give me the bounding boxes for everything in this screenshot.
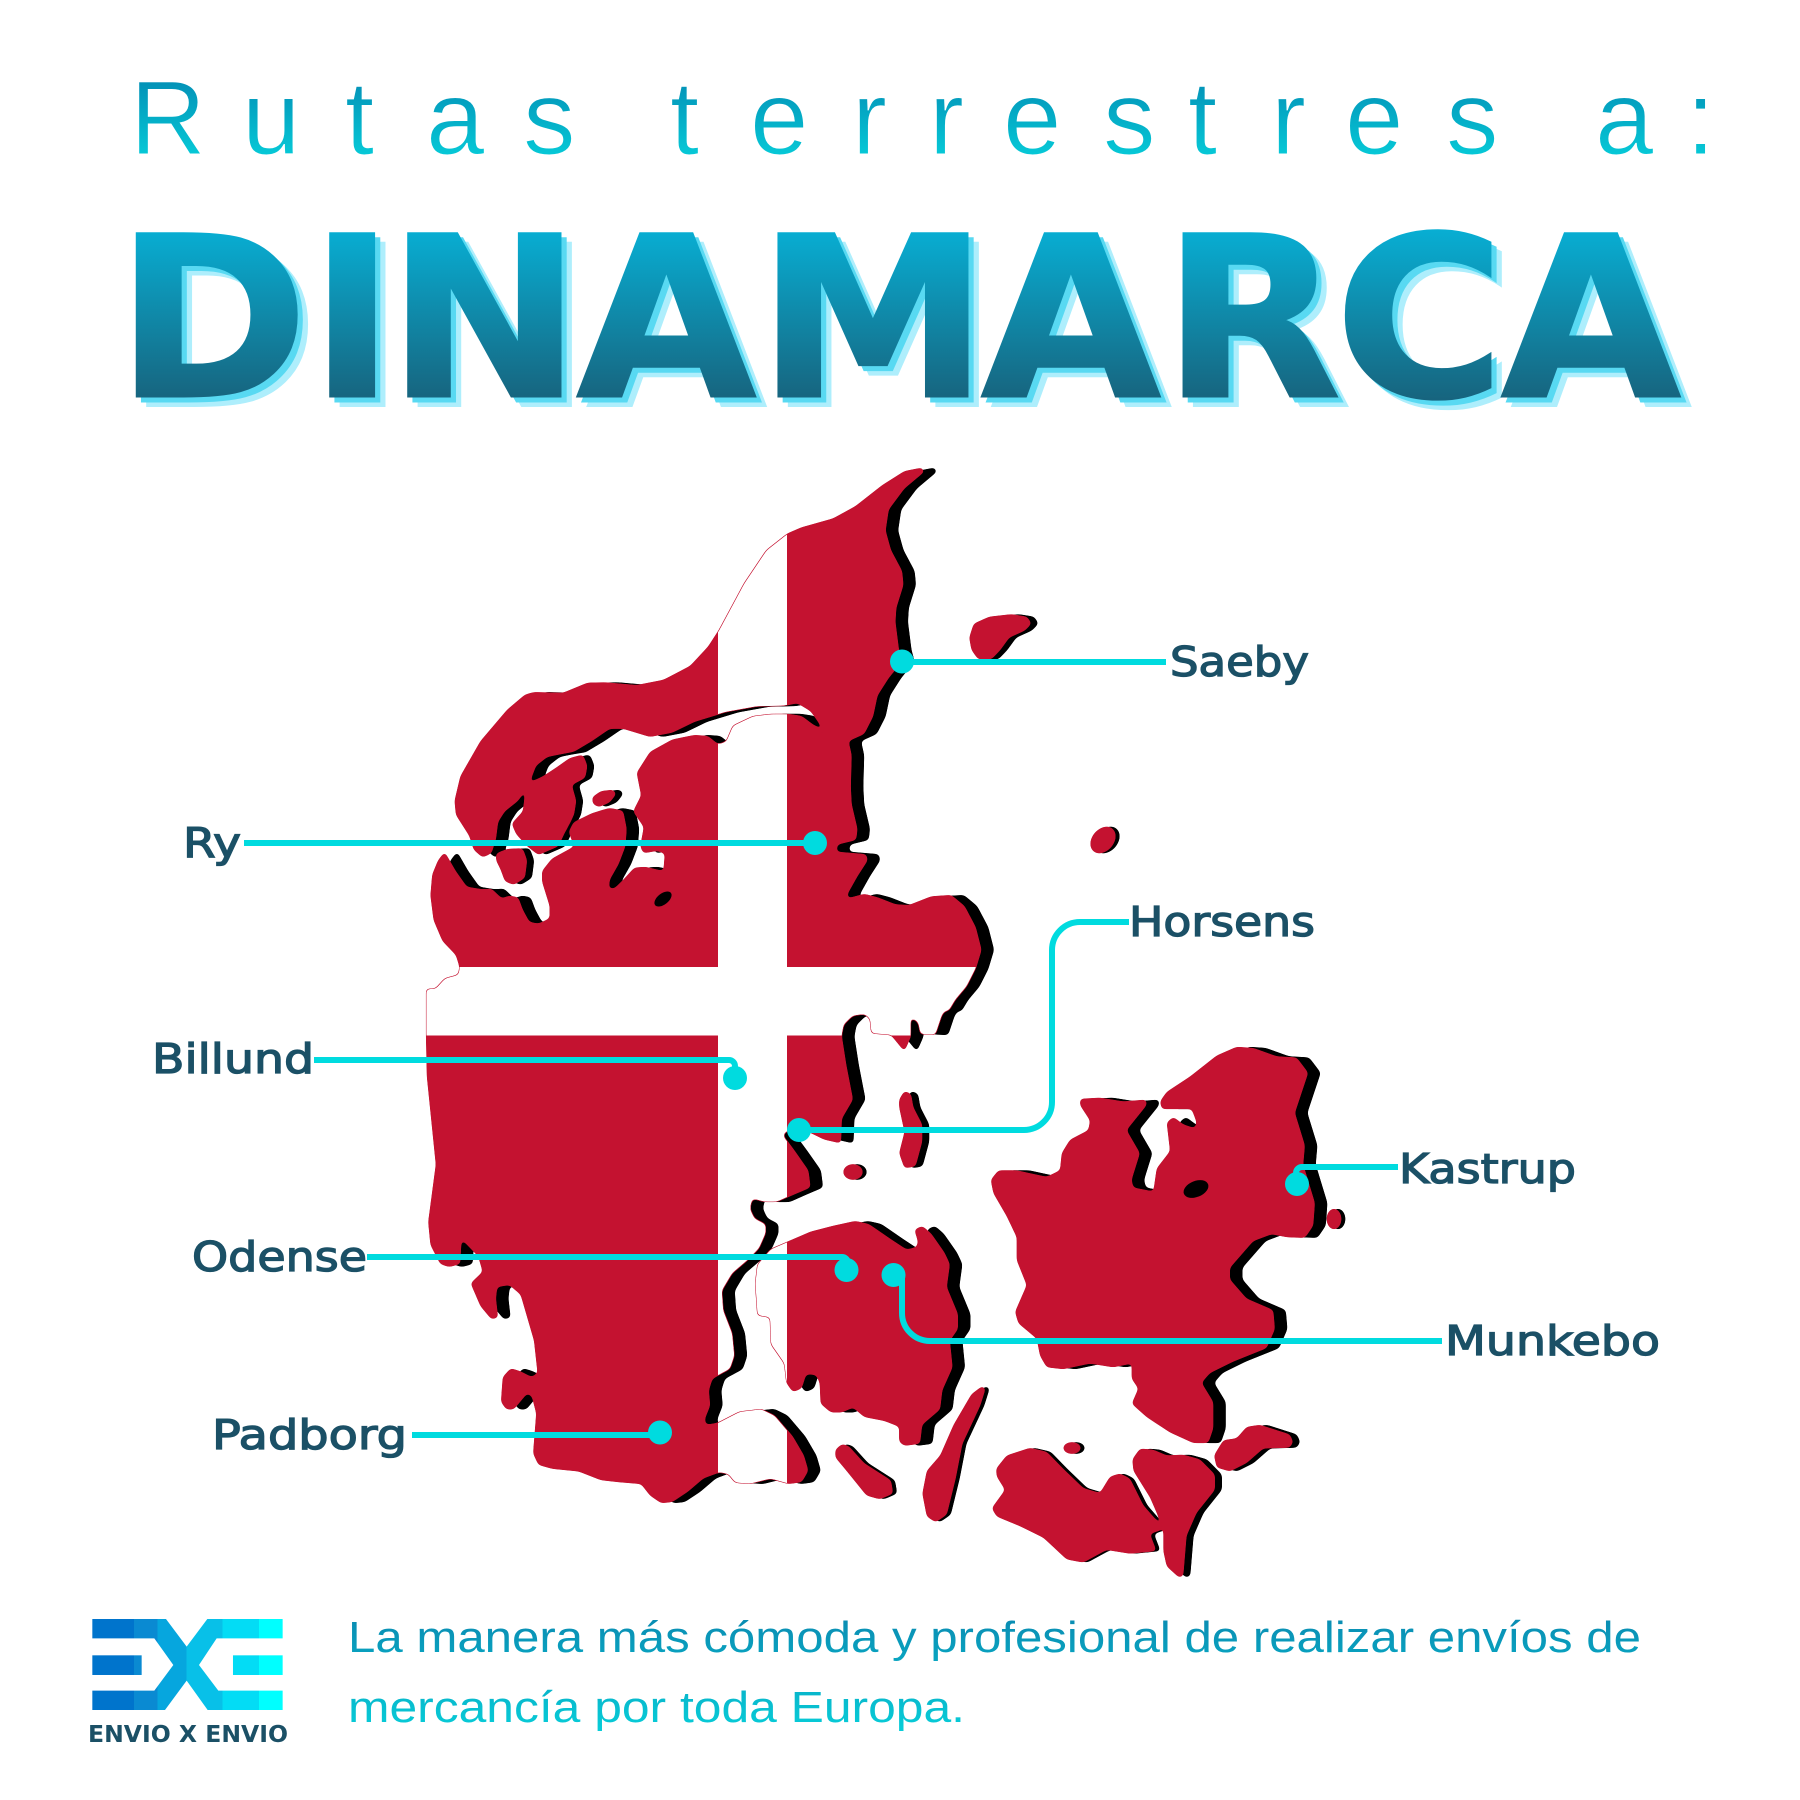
logo wordmark: ENVIO X ENVIO bbox=[88, 1722, 288, 1748]
heading: DINAMARCA: DINAMARCA bbox=[126, 198, 1691, 459]
icon: EXE mark bbox=[92, 1619, 283, 1710]
callout: Ry: Ry bbox=[183, 819, 241, 867]
callout: Padborg bbox=[212, 1411, 672, 1459]
callout: Kastrup bbox=[1285, 1145, 1576, 1196]
callout: Ry bbox=[183, 819, 827, 867]
heading: DINAMARCA: DINAMARCA bbox=[115, 189, 1681, 449]
callout: Horsens: Horsens bbox=[1129, 898, 1315, 946]
callout: Billund: Billund bbox=[152, 1035, 314, 1083]
callout: Munkebo: Munkebo bbox=[1445, 1317, 1660, 1365]
callout: Munkebo bbox=[882, 1263, 1660, 1365]
footer tagline: mercancía por toda Europa. bbox=[348, 1683, 965, 1732]
callout: Saeby: Saeby bbox=[1170, 638, 1309, 686]
callout: Kastrup: Kastrup bbox=[1399, 1145, 1576, 1193]
footer tagline: La manera más cómoda y profesional de realizar envíos de bbox=[348, 1613, 1641, 1662]
callout: Odense: Odense bbox=[192, 1233, 367, 1281]
callout: Odense bbox=[192, 1233, 858, 1282]
map shadow bbox=[438, 468, 1345, 1578]
logo: Envio x Envio bbox=[88, 1619, 288, 1748]
callout: Horsens bbox=[787, 898, 1315, 1142]
white flag cross bbox=[426, 534, 976, 1484]
map of Denmark with flag bbox=[400, 400, 1346, 1600]
callout: Billund bbox=[152, 1035, 747, 1090]
heading: DINAMARCA: DINAMARCA bbox=[121, 194, 1686, 454]
title: Rutas terrestres a:: Rutas terrestres a: bbox=[130, 60, 1715, 177]
callout: Padborg: Padborg bbox=[212, 1411, 407, 1459]
footer tagline bbox=[348, 1613, 1641, 1732]
map land in red bbox=[426, 468, 1341, 1578]
lakes bbox=[652, 889, 1211, 1201]
callout: Saeby bbox=[890, 638, 1309, 686]
